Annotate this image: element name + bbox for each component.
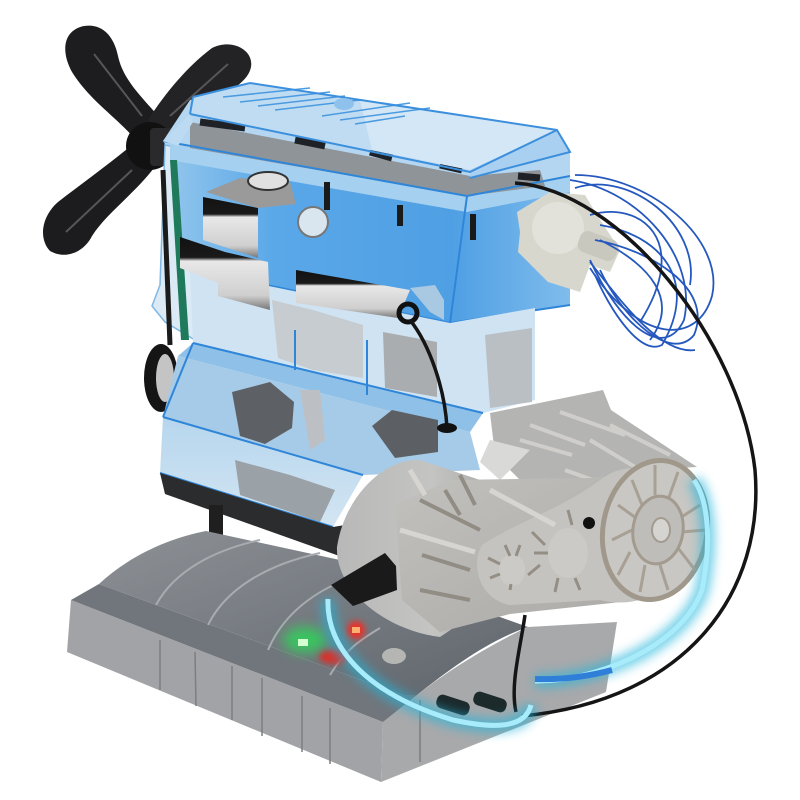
button bbox=[382, 648, 406, 664]
crank chamber bbox=[163, 356, 480, 475]
dark plugs bbox=[435, 690, 508, 717]
USB connector bbox=[331, 553, 397, 606]
gray base unit bbox=[67, 531, 617, 782]
manifold pipe left bbox=[180, 237, 270, 310]
chamber band bbox=[178, 343, 483, 432]
motor plate ribs bbox=[420, 475, 480, 600]
lower pulley bbox=[144, 344, 178, 412]
manifold cap bbox=[248, 172, 288, 190]
manifold outlet bbox=[410, 285, 444, 320]
motor cylinder bbox=[337, 460, 495, 637]
base creases bbox=[160, 640, 420, 764]
cover top surface bbox=[190, 83, 557, 170]
upper end pale bbox=[480, 440, 530, 480]
manifold dial bbox=[298, 207, 328, 237]
water pump bbox=[517, 192, 621, 292]
wire knot bbox=[437, 423, 457, 433]
hub centre bbox=[652, 518, 670, 542]
gearbox hole bbox=[583, 517, 595, 529]
fan blade: lower left bbox=[43, 140, 154, 255]
black power wire bbox=[410, 183, 756, 716]
large gear spokes bbox=[612, 465, 705, 592]
blue wires bbox=[570, 175, 713, 350]
fan blade: upper left bbox=[65, 26, 168, 148]
LED: green bbox=[298, 639, 308, 646]
manifold pipe right bbox=[296, 270, 410, 318]
crank: centre bbox=[300, 390, 325, 450]
piston: right bbox=[485, 328, 532, 408]
chrome exhaust manifold bbox=[180, 172, 444, 322]
wire ring bbox=[399, 304, 417, 322]
rocker dark knobs bbox=[200, 122, 540, 178]
small gear spikes bbox=[488, 545, 520, 590]
black belt bbox=[163, 170, 170, 345]
valve springs bbox=[327, 182, 473, 240]
lower front pan bbox=[160, 417, 363, 527]
crank: left bbox=[232, 382, 294, 444]
cover cap bbox=[334, 98, 354, 110]
green belt bbox=[170, 160, 189, 340]
middle gear disc bbox=[548, 528, 588, 578]
small gear disc bbox=[499, 554, 525, 586]
large gear cover bbox=[592, 452, 718, 608]
glow bbox=[328, 480, 708, 725]
crank: right bbox=[372, 410, 438, 458]
fiber blue tip bbox=[535, 670, 612, 679]
base arch ridges bbox=[156, 540, 380, 675]
engine upper block bbox=[152, 83, 570, 340]
fiber core bbox=[328, 480, 708, 725]
block body bbox=[175, 150, 570, 323]
ribs bbox=[510, 412, 670, 515]
cylinder chamber bbox=[190, 270, 535, 413]
grey rocker band bbox=[190, 122, 545, 196]
large gear hub bbox=[629, 493, 687, 567]
LED: red upper bbox=[352, 627, 360, 633]
peanut plate bbox=[477, 468, 690, 605]
base right side bbox=[381, 622, 617, 782]
cover skirt bbox=[163, 114, 193, 146]
gearbox main body bbox=[395, 470, 680, 632]
engine lower block bbox=[160, 270, 535, 527]
fan bbox=[43, 26, 251, 255]
fan blade: upper right bbox=[148, 44, 251, 148]
base front left bbox=[67, 600, 383, 782]
fan shaft bbox=[150, 128, 176, 166]
base plate, black bbox=[160, 473, 345, 558]
base top bbox=[99, 531, 528, 695]
middle gear spikes bbox=[528, 510, 580, 592]
LED glow: green bbox=[283, 627, 327, 653]
manifold head bbox=[203, 197, 258, 258]
base top ledge bbox=[71, 584, 417, 722]
left pale end bbox=[152, 145, 195, 340]
block seams bbox=[160, 330, 483, 527]
cover right paler bbox=[360, 100, 557, 170]
manifold top bbox=[206, 178, 296, 208]
top cover bbox=[163, 83, 570, 178]
LED glow: red upper bbox=[347, 621, 365, 639]
LED: red lower bbox=[319, 650, 351, 664]
piston: center bbox=[383, 332, 437, 397]
body highlights bbox=[400, 470, 555, 552]
block upper darker rib bbox=[170, 143, 570, 212]
pump outlet bbox=[575, 229, 621, 263]
gearbox bbox=[337, 390, 718, 637]
pump face bbox=[532, 202, 584, 254]
cover backing bbox=[163, 83, 570, 212]
gearbox upper housing bbox=[490, 390, 697, 500]
glowing fiber optic cable bbox=[328, 480, 708, 725]
stand post bbox=[204, 505, 228, 559]
pump housing bbox=[517, 192, 620, 292]
piston: left bbox=[272, 300, 363, 378]
fan hub bbox=[126, 122, 174, 170]
cover ribs bbox=[223, 88, 430, 124]
cover edges bbox=[190, 83, 570, 178]
block outlines bbox=[163, 141, 570, 323]
